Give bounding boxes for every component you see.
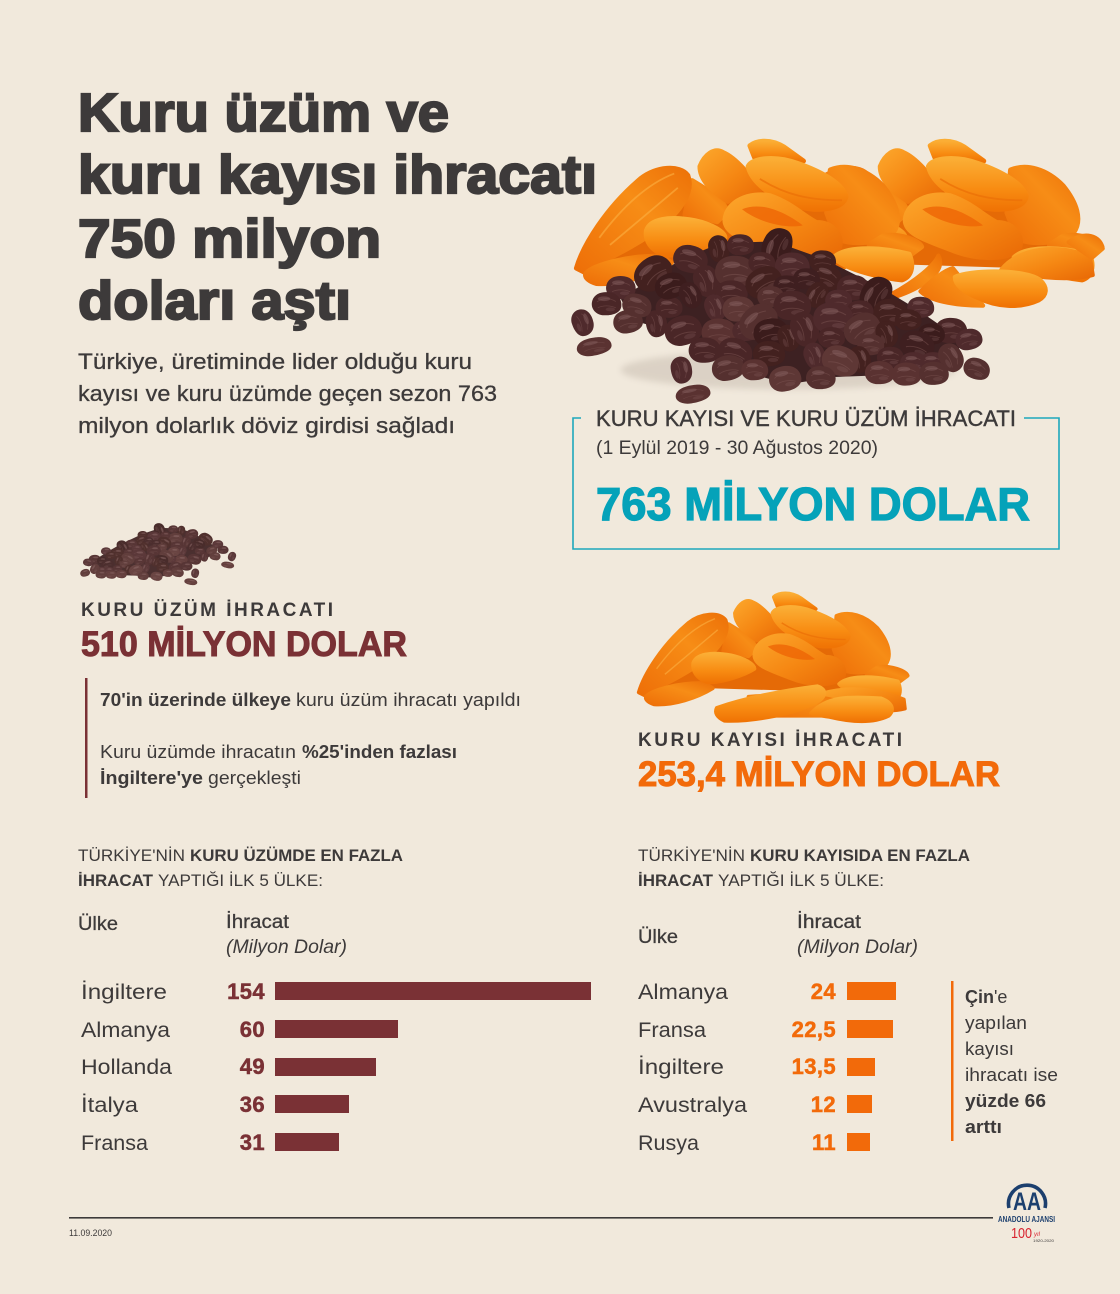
- bar chart: apricot exports: 13,5: [792, 1054, 836, 1079]
- raisin chart heading: [78, 846, 403, 890]
- bar chart: apricot exports: Rusya: [638, 1132, 699, 1155]
- total export box: (1 Eylül 2019 - 30 Ağustos 2020): [596, 438, 878, 459]
- bar chart: apricot exports: 11: [812, 1130, 836, 1155]
- logo: Anadolu Ajansi: AA: [1013, 1188, 1041, 1216]
- bar chart: apricot exports: İngiltere: [638, 1056, 724, 1079]
- raisin notes: kuru üzüm ihracatı yapıldı: [296, 690, 521, 710]
- apricot table header: [638, 912, 918, 958]
- bar chart: apricot exports: [638, 979, 896, 1155]
- callout: China: kayısı: [965, 1039, 1014, 1059]
- raisin table header: İhracat: [226, 912, 290, 933]
- callout: China: ihracatı ise: [965, 1065, 1058, 1085]
- title: doları aştı: [78, 271, 351, 331]
- bar chart: apricot exports: 24: [811, 979, 836, 1004]
- bar chart: raisin exports: 36: [240, 1092, 265, 1117]
- bar chart: raisin exports: 60: [240, 1017, 265, 1042]
- apricot chart heading: YAPTIĞI İLK 5 ÜLKE:: [718, 871, 884, 890]
- logo: Anadolu Ajansi: [998, 1185, 1055, 1243]
- callout: China: [951, 981, 1058, 1141]
- raisin notes: Kuru üzümde ihracatın: [100, 742, 296, 762]
- bar chart: raisin exports: İtalya: [81, 1094, 138, 1117]
- total export box: KURU KAYISI VE KURU ÜZÜM İHRACATI: [596, 406, 1016, 431]
- apricot table header: Ülke: [638, 927, 678, 948]
- bar chart: raisin exports: 154: [227, 979, 265, 1004]
- apricot chart heading: TÜRKİYE'NİN: [638, 846, 745, 865]
- title: 750 milyon: [78, 209, 381, 269]
- heading: apricot exports: 253,4 MİLYON DOLAR: [638, 755, 1000, 794]
- total export box: [573, 406, 1059, 549]
- apricot table header: (Milyon Dolar): [797, 937, 918, 958]
- bar chart: raisin exports: 49: [240, 1054, 265, 1079]
- title: [78, 83, 597, 331]
- subtitle text: Türkiye, üretiminde lider olduğu kuru: [78, 349, 472, 374]
- raisin chart heading: TÜRKİYE'NİN: [78, 846, 185, 865]
- bar chart: apricot exports: Fransa: [638, 1019, 706, 1042]
- raisin chart heading: YAPTIĞI İLK 5 ÜLKE:: [158, 871, 323, 890]
- logo: Anadolu Ajansi: 100: [1011, 1225, 1032, 1242]
- bar chart: raisin exports: İngiltere: [81, 981, 167, 1004]
- subtitle text: [78, 349, 497, 438]
- callout: China: yapılan: [965, 1013, 1027, 1033]
- bar chart: raisin exports: Fransa: [81, 1132, 148, 1155]
- title: Kuru üzüm ve: [78, 83, 449, 143]
- bar chart: raisin exports: Almanya: [81, 1019, 170, 1042]
- raisin table header: (Milyon Dolar): [226, 937, 347, 958]
- raisin notes: 70'in üzerinde ülkeye: [100, 690, 291, 710]
- callout: China: arttı: [965, 1117, 1002, 1137]
- raisin notes: gerçekleşti: [208, 768, 301, 788]
- raisin notes: İngiltere'ye: [100, 768, 203, 788]
- raisin table header: Ülke: [78, 914, 118, 935]
- apricot chart heading: İHRACAT: [638, 871, 714, 890]
- image: dried apricots and raisins: [568, 141, 1103, 406]
- logo: Anadolu Ajansi: 1920-2020: [1033, 1238, 1055, 1243]
- raisin notes: [85, 678, 521, 798]
- title: kuru kayısı ihracatı: [78, 145, 597, 205]
- bar chart: apricot exports: Avustralya: [638, 1094, 747, 1117]
- bar chart: apricot exports: 12: [811, 1092, 836, 1117]
- raisin table header: [78, 912, 347, 958]
- bar chart: apricot exports: Almanya: [638, 981, 728, 1004]
- subtitle text: kayısı ve kuru üzümde geçen sezon 763: [78, 381, 497, 406]
- logo: Anadolu Ajansi: yıl: [1033, 1232, 1041, 1238]
- apricot table header: İhracat: [797, 912, 862, 933]
- heading: raisin exports: 510 MİLYON DOLAR: [81, 625, 407, 664]
- callout: China: Çin'e: [965, 987, 1007, 1007]
- raisin chart heading: KURU ÜZÜMDE EN FAZLA: [190, 846, 403, 865]
- heading: raisin exports: [81, 600, 407, 664]
- raisin chart heading: İHRACAT: [78, 871, 154, 890]
- apricot chart heading: KURU KAYISIDA EN FAZLA: [750, 846, 970, 865]
- image: apricots small: [639, 594, 908, 721]
- footer rule and date: 11.09.2020: [69, 1228, 112, 1239]
- apricot chart heading: [638, 846, 970, 890]
- logo: Anadolu Ajansi: ANADOLU AJANSI: [998, 1215, 1055, 1224]
- bar chart: raisin exports: Hollanda: [81, 1056, 172, 1079]
- heading: apricot exports: [638, 730, 1000, 794]
- raisin notes: %25'inden fazlası: [302, 742, 457, 762]
- subtitle text: milyon dolarlık döviz girdisi sağladı: [78, 413, 455, 438]
- bar chart: apricot exports: 22,5: [792, 1017, 836, 1042]
- total export box: 763 MİLYON DOLAR: [596, 478, 1030, 530]
- heading: apricot exports: KURU KAYISI İHRACATI: [638, 730, 902, 751]
- heading: raisin exports: KURU ÜZÜM İHRACATI: [81, 600, 333, 621]
- image: raisins small: [79, 522, 237, 586]
- bar chart: raisin exports: 31: [240, 1130, 265, 1155]
- callout: China: yüzde 66: [965, 1091, 1046, 1111]
- bar chart: raisin exports: [81, 979, 591, 1155]
